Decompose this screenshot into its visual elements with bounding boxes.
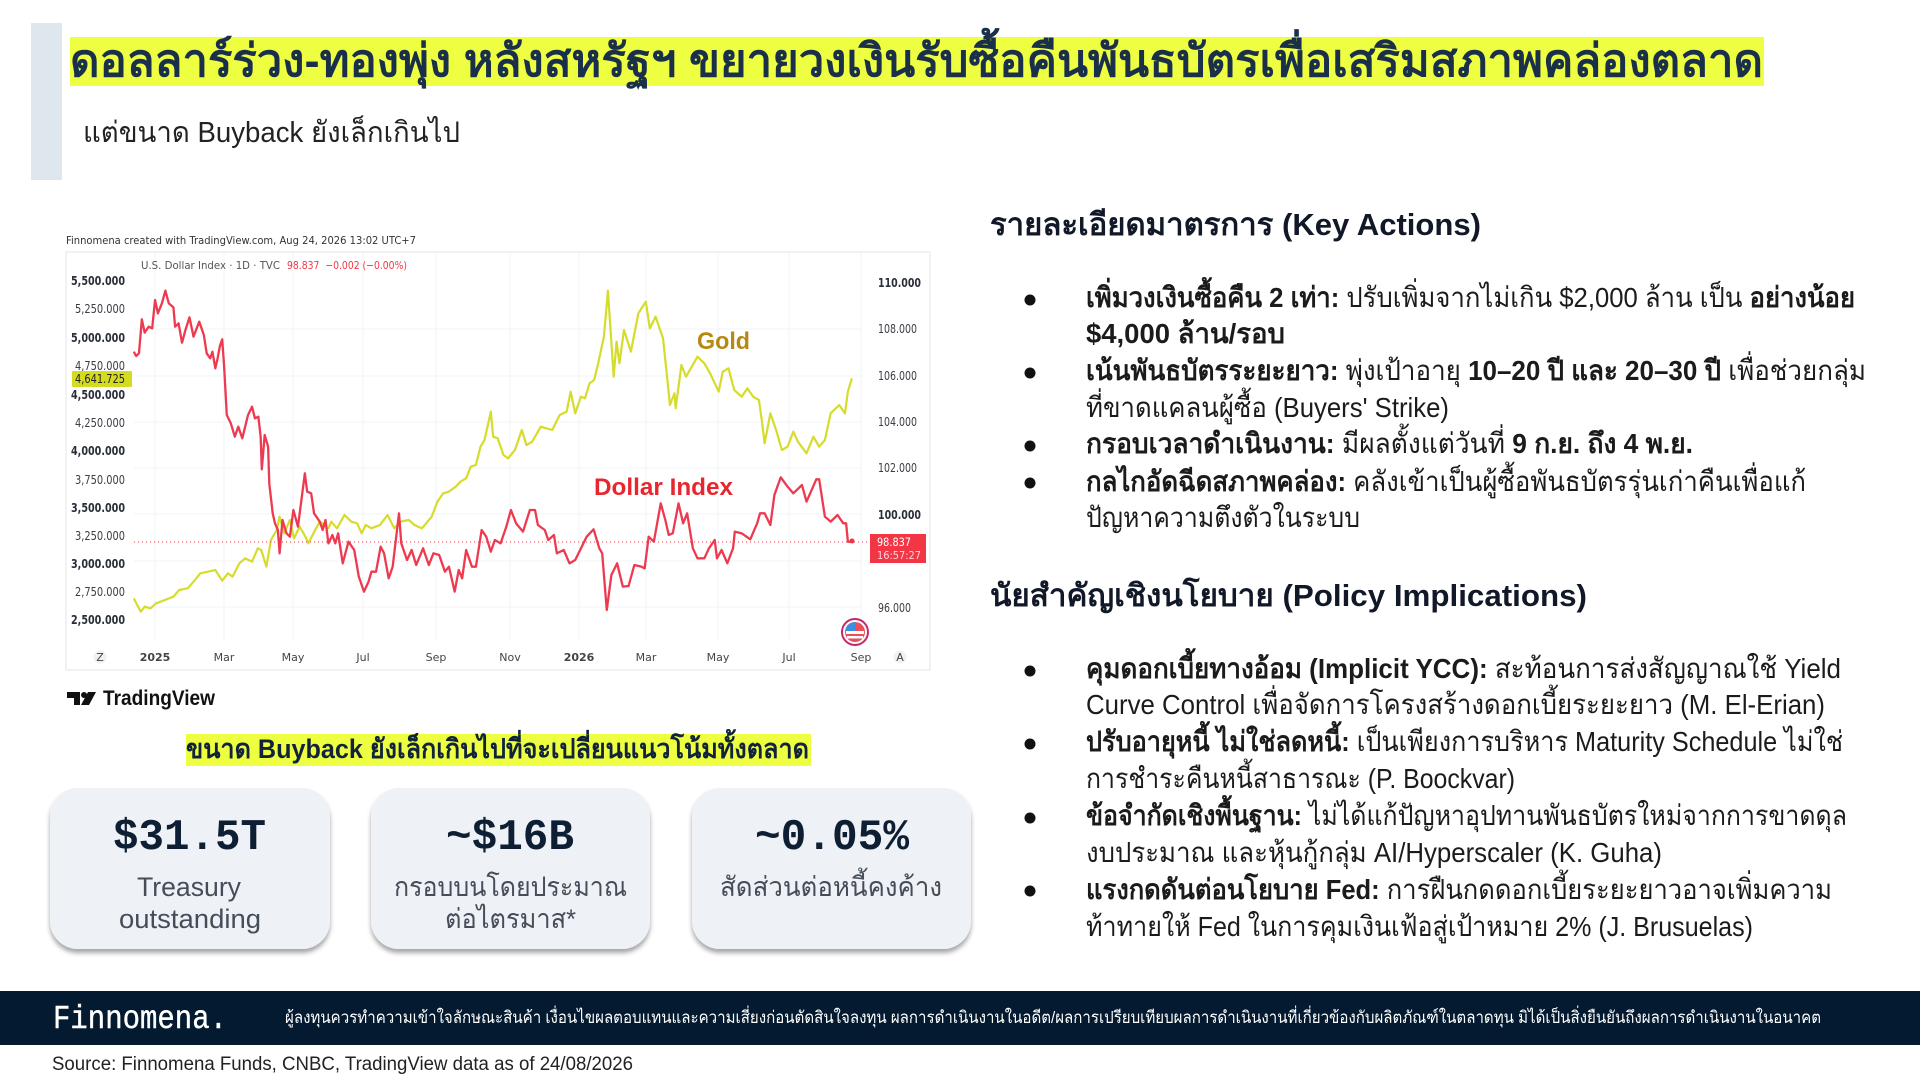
time axis: 2025 [140,651,170,664]
accent bar [31,23,62,180]
right axis [878,276,921,615]
left axis: 3,750.000 [75,473,125,487]
chart credit: Finnomena created with TradingView.com, Aug 24, 2026 13:02 UTC+7 [66,234,416,247]
list: key actions: $4,000 ล้าน/รอบ [1086,318,1285,349]
right axis: 102.000 [878,461,917,475]
list: policy implications: คุมดอกเบี้ยทางอ้อม (Implicit YCC): สะท้อนการส่งสัญญาณใช้ Yield [1086,647,1841,686]
list: key actions: เน้นพันธบัตรระยะยาว: พุ่งเป้าอายุ 10–20 ปี และ 20–30 ปี เพื่อช่วยกลุ่ม [1086,351,1866,388]
list: policy implications: การชำระคืนหนี้สาธารณะ (P. Boockvar) [1086,758,1515,794]
time axis: May [707,651,730,664]
list: policy implications: ข้อจำกัดเชิงพื้นฐาน: ไม่ได้แก้ปัญหาอุปทานพันธบัตรใหม่จากการขาดดุล [1086,794,1847,834]
left axis: 3,000.000 [71,557,125,571]
list: key actions [1024,276,1866,533]
series legend: U.S. Dollar Index · 1D · TVC [141,259,280,272]
time axis [94,650,906,664]
left axis [71,274,132,627]
list: key actions: ปัญหาความตึงตัวในระบบ [1086,501,1360,533]
time axis: Z [96,651,104,664]
callout heading: ขนาด Buyback ยังเล็กเกินไปที่จะเปลี่ยนแนวโน้มทั้งตลาด [186,728,809,764]
footer band [0,991,1920,1045]
right axis: 108.000 [878,322,917,336]
time axis: May [282,651,305,664]
left axis: 3,500.000 [71,501,125,515]
left axis: 4,750.000 [75,359,125,373]
time axis: 2026 [564,651,595,664]
time axis: Sep [851,651,871,664]
list: key actions: กลไกอัดฉีดสภาพคล่อง: คลังเข้าเป็นผู้ซื้อพันธบัตรรุ่นเก่าคืนเพื่อแก้ [1086,461,1806,499]
right axis: 104.000 [878,415,917,429]
right axis: 96.000 [878,601,911,615]
price tag: 98.837 [877,535,911,549]
left axis: 4,000.000 [71,444,125,458]
time axis: Mar [214,651,235,664]
card: treasury outstanding [50,788,330,949]
list: key actions: เพิ่มวงเงินซื้อคืน 2 เท่า: ปรับเพิ่มจากไม่เกิน $2,000 ล้าน เป็น อย่างน้อย [1086,276,1855,313]
brand logo: Finnomena. [53,1001,227,1038]
card: treasury outstanding: $31.5T [113,813,266,863]
list: policy implications: ปรับอายุหนี้ ไม่ใช่ลดหนี้: เป็นเพียงการบริหาร Maturity Schedule ไม่ใช่ [1086,720,1843,759]
subtitle: แต่ขนาด Buyback ยังเล็กเกินไป [83,114,460,149]
card: quarterly cap: กรอบบนโดยประมาณ [394,872,627,902]
left axis: 2,750.000 [75,585,125,599]
time axis: A [896,651,904,664]
label: gold: Gold [697,328,750,355]
list: policy implications: งบประมาณ และหุ้นกู้กลุ่ม AI/Hyperscaler (K. Guha) [1086,837,1662,870]
left axis: 2,500.000 [71,613,125,627]
card: treasury outstanding: outstanding [119,904,261,934]
dollar index line [134,291,851,610]
chart frame [66,252,930,670]
chart [66,234,930,710]
TradingView logo: TradingView [103,687,216,710]
price tag [870,534,926,563]
time axis: Sep [426,651,446,664]
list: policy implications: แรงกดดันต่อนโยบาย Fed: การฝืนกดดอกเบี้ยระยะยาวอาจเพิ่มความ [1086,869,1832,905]
left axis: 5,500.000 [71,274,125,288]
list: key actions: ที่ขาดแคลนผู้ซื้อ (Buyers' Strike) [1086,387,1449,425]
list: policy implications: ท้าทายให้ Fed ในการคุมเงินเฟ้อสู่เป้าหมาย 2% (J. Brusuelas) [1086,910,1753,944]
label: dollar index: Dollar Index [594,474,734,501]
title: ดอลลาร์ร่วง-ทองพุ่ง หลังสหรัฐฯ ขยายวงเงินรับซื้อคืนพันธบัตรเพื่อเสริมสภาพคล่องตลาด [70,27,1763,90]
time axis: Mar [636,651,657,664]
heading: policy implications: นัยสำคัญเชิงนโยบาย (Policy Implications) [990,577,1587,614]
right axis: 100.000 [878,508,921,522]
left axis: 3,250.000 [75,529,125,543]
icon: US flag [842,619,868,645]
card: quarterly cap: ต่อไตรมาส* [445,904,576,934]
right axis: 110.000 [878,276,921,290]
left axis: 5,250.000 [75,302,125,316]
last price dot [850,538,854,544]
list: key actions: กรอบเวลาดำเนินงาน: มีผลตั้งแต่วันที่ 9 ก.ย. ถึง 4 พ.ย. [1086,423,1693,459]
time axis: Jul [355,651,370,664]
card: share of outstanding debt: สัดส่วนต่อหนี้คงค้าง [720,867,942,902]
grid lines [134,252,862,640]
heading: key actions: รายละเอียดมาตรการ (Key Actions) [990,207,1481,242]
time axis: Jul [781,651,796,664]
gold line [134,291,852,612]
series values: 98.837 −0.002 (−0.00%) [287,259,407,272]
card: quarterly cap [371,788,650,949]
card: treasury outstanding: Treasury [137,872,241,902]
last price line [134,541,870,543]
left axis: 5,000.000 [71,331,125,345]
left axis: 4,500.000 [71,388,125,402]
list: policy implications: Curve Control เพื่อจัดการโครงสร้างดอกเบี้ยระยะยาว (M. El-Erian) [1086,684,1825,720]
price tag: 16:57:27 [877,550,921,562]
card: quarterly cap: ~$16B [446,813,574,863]
card: share of outstanding debt [692,788,971,949]
source note: Source: Finnomena Funds, CNBC, TradingView data as of 24/08/2026 [52,1054,633,1075]
left axis: 4,641.725 [75,372,125,386]
card: share of outstanding debt: ~0.05% [755,813,910,863]
right axis: 106.000 [878,369,917,383]
time axis: Nov [499,651,521,664]
left axis: 4,250.000 [75,416,125,430]
list: policy implications [1024,647,1847,944]
